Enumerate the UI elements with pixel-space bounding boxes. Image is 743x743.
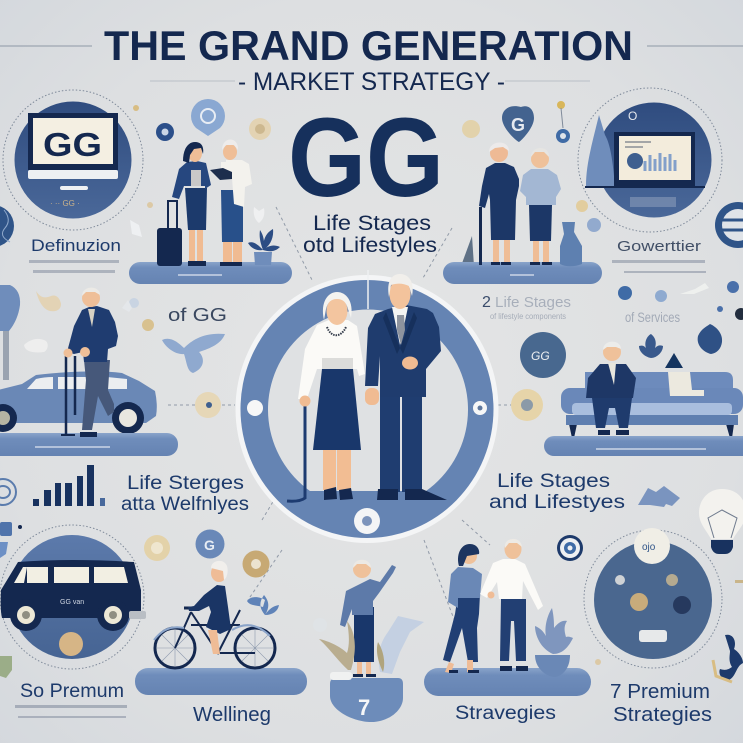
panel: definition monitor (3, 90, 143, 230)
panel: definition monitor: · ·· GG · (50, 199, 80, 208)
platform: bike (135, 668, 307, 695)
figures: couple walking with plant (443, 539, 573, 677)
label: 2 life stages faded: Life Stages (495, 294, 571, 311)
label: life stages right (489, 471, 625, 513)
platform: sofa (544, 436, 743, 456)
woman in light blue sweater (520, 148, 561, 265)
label: benefits: Gowerttier (617, 238, 701, 255)
figure: walking man (61, 288, 118, 437)
label: premium left (15, 681, 127, 718)
icon: light bulb (699, 489, 743, 554)
label: life stages left: Life Sterges (127, 473, 244, 494)
small floating icons top left (130, 99, 271, 237)
icon: globe (0, 205, 14, 247)
label: strategies: Stravegies (455, 703, 556, 724)
label: 2 life stages faded: of lifestyle components (490, 312, 566, 321)
ring marker right (473, 401, 487, 415)
man in white jacket (210, 140, 252, 266)
platform: number seven: 7 (358, 695, 370, 720)
icon: mountain right (638, 486, 680, 507)
figure: man on sofa (561, 342, 743, 438)
label: 2 life stages faded: 2 (482, 294, 491, 311)
panel: benefits laptop (578, 88, 722, 232)
floating icons left (24, 291, 227, 373)
heading: life stages and lifestyles top: Life Stages (313, 212, 431, 235)
man in white (480, 539, 543, 671)
platform 1 (129, 262, 292, 284)
icon: suitcase (157, 201, 182, 266)
ring marker bottom (354, 508, 380, 534)
label: 7 premium strategies: Strategies (613, 704, 712, 726)
platform: car (0, 433, 178, 456)
heading: life stages and lifestyles top (303, 212, 437, 257)
title (104, 22, 633, 96)
label: life stages left (121, 473, 249, 515)
medals around bike (144, 530, 270, 578)
platform: number seven (330, 672, 403, 722)
floating icons top right: G (511, 115, 525, 135)
label: benefits (612, 238, 706, 273)
right edge icons (595, 580, 743, 682)
panel: premium strategies disc (584, 528, 722, 668)
potted plant (248, 207, 280, 265)
hero figure: man (365, 274, 447, 500)
small floating icons right: GG (531, 349, 550, 363)
platform: couple bottom (424, 668, 591, 696)
panel: premium strategies disc: ojo (642, 542, 656, 553)
small floating icons right (520, 281, 743, 378)
vase (560, 222, 582, 266)
medals around bike: G (204, 537, 215, 553)
woman in navy coat with cane (479, 142, 519, 265)
label: premium left: So Premum (20, 681, 124, 702)
left side icons (0, 522, 22, 678)
heading: life stages and lifestyles top: otd Lifestyles (303, 234, 437, 257)
figures: two older women (479, 142, 582, 266)
label: 2 life stages faded (482, 294, 680, 325)
figure: woman on bicycle (154, 561, 279, 668)
panel: benefits laptop: O (628, 109, 637, 123)
ring tick top (367, 270, 369, 309)
sofa (561, 372, 743, 438)
icon: emblem right edge (715, 202, 743, 248)
floating icons left: of GG (168, 305, 227, 325)
bar chart (33, 465, 105, 506)
floating icons top right (461, 101, 601, 266)
panel: van: GG van (60, 599, 84, 606)
table decor (668, 372, 704, 396)
label: 7 premium strategies (610, 681, 712, 726)
text decor on platforms (35, 274, 706, 686)
title: THE GRAND GENERATION (104, 22, 633, 69)
figure: woman waving (340, 560, 396, 677)
title: - MARKET STRATEGY - (238, 68, 505, 96)
panel: definition monitor: GG (43, 126, 102, 163)
ring marker left (247, 400, 263, 416)
label: 2 life stages faded: of Services (625, 309, 680, 325)
icon: target (557, 535, 583, 561)
label: life stages left: atta Welfnlyes (121, 494, 249, 515)
label: 7 premium strategies: 7 Premium (610, 681, 710, 703)
beige rings (195, 389, 543, 421)
figure: car (0, 371, 157, 434)
label: definition: Definuzion (31, 236, 121, 255)
hero: central ring (236, 270, 498, 543)
hero figure: woman (287, 292, 365, 501)
plants around waving woman (313, 616, 424, 674)
plant pot (535, 608, 573, 677)
woman in navy (172, 142, 211, 266)
icon: fingerprint left (0, 479, 16, 505)
big GG heading: GG (288, 95, 444, 220)
label: definition (29, 236, 121, 273)
woman in blue (443, 544, 482, 673)
label: life stages right: Life Stages (497, 471, 610, 492)
figures: couple with suitcase (157, 140, 280, 266)
label: wellbeing: Wellineg (193, 704, 271, 726)
panel: van (0, 525, 146, 669)
label: life stages right: and Lifestyes (489, 492, 625, 513)
platform 2 (443, 262, 602, 284)
icon: map pin left (0, 285, 20, 380)
